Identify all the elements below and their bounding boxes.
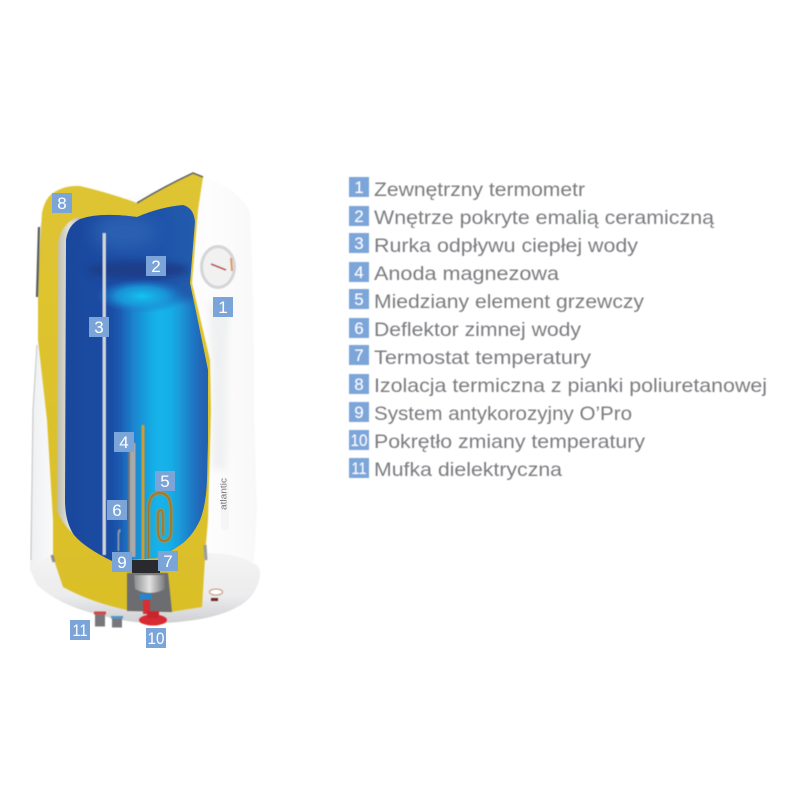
legend item 8: Izolacja termiczna z pianki poliuretanowej <box>374 375 767 397</box>
legend item 2: 2 <box>354 207 364 226</box>
white heater casing <box>30 176 257 570</box>
badge 6 <box>107 500 127 520</box>
legend item 4: 4 <box>354 263 364 282</box>
badge 7 <box>158 551 178 571</box>
bottom tray <box>30 553 260 623</box>
diagram number badges <box>52 193 233 648</box>
legend item 8: 8 <box>354 375 364 394</box>
legend item 6: Deflektor zimnej wody <box>374 319 581 341</box>
brand label: atlantic <box>218 478 230 510</box>
legend item 3: 3 <box>354 234 364 253</box>
legend item 9: 9 <box>354 403 364 422</box>
legend item 11: Mufka dielektryczna <box>374 459 562 481</box>
legend item 10: 10 <box>350 431 368 450</box>
badge 6: 6 <box>112 501 122 520</box>
badge 3 <box>89 317 109 337</box>
magnesium anode <box>128 443 136 557</box>
legend item 9: System antykorozyjny O’Pro <box>374 403 632 425</box>
polyurethane foam insulation <box>38 173 211 612</box>
legend list <box>349 177 767 481</box>
light glow <box>100 280 182 311</box>
left casing edge <box>31 345 37 560</box>
flange and mechanism cutout <box>127 573 172 612</box>
legend item 5: 5 <box>354 290 364 309</box>
blue enamelled tank interior <box>65 205 208 561</box>
badge 1 <box>213 297 233 317</box>
badge 9: 9 <box>117 553 127 572</box>
thermometer channel shading <box>208 300 231 470</box>
legend item 11: 11 <box>352 459 366 478</box>
water heater illustration <box>30 173 260 628</box>
dielectric nipples <box>94 612 123 628</box>
blue connector <box>140 594 152 600</box>
badge 4 <box>114 432 134 452</box>
hot water outlet pipe <box>102 233 106 555</box>
thermostat sleeve <box>142 425 144 560</box>
legend item 4: Anoda magnezowa <box>374 263 559 285</box>
copper heating element <box>148 493 171 558</box>
badge 5 <box>155 471 175 491</box>
badge 2: 2 <box>151 257 161 276</box>
badge 9 <box>112 552 132 572</box>
legend item 10: Pokrętło zmiany temperatury <box>374 431 645 453</box>
badge 8 <box>52 193 72 213</box>
dark band below top <box>86 261 190 279</box>
legend item 3: Rurka odpływu ciepłej wody <box>374 235 638 257</box>
small energy logo <box>210 589 222 601</box>
legend item 6: 6 <box>354 319 364 338</box>
cold water deflector <box>118 530 120 551</box>
red temperature knob <box>139 600 167 626</box>
badge 10: 10 <box>148 629 164 648</box>
legend item 2: Wnętrze pokryte emalią ceramiczną <box>374 207 714 229</box>
badge 4: 4 <box>119 433 129 452</box>
badge 8: 8 <box>57 194 67 213</box>
legend item 7: Termostat temperatury <box>374 347 591 369</box>
legend item 5: Miedziany element grzewczy <box>374 291 644 313</box>
badge 2 <box>146 256 166 276</box>
badge 11: 11 <box>72 621 88 640</box>
bright central column <box>112 300 209 575</box>
black flange <box>132 560 160 573</box>
legend item 7: 7 <box>354 346 364 365</box>
brand label pill <box>221 478 229 530</box>
lighter top of tank <box>93 214 157 250</box>
dark seams on foam <box>37 173 206 562</box>
badge 5: 5 <box>160 472 170 491</box>
badge 7: 7 <box>163 552 173 571</box>
metal thermostat housing <box>134 575 165 593</box>
badge 3: 3 <box>94 318 104 337</box>
badge 1: 1 <box>218 298 228 317</box>
legend item 1: Zewnętrzny termometr <box>374 179 586 201</box>
legend item 1: 1 <box>354 178 364 197</box>
inner tank wall <box>57 217 82 540</box>
external thermometer dial <box>200 245 236 289</box>
